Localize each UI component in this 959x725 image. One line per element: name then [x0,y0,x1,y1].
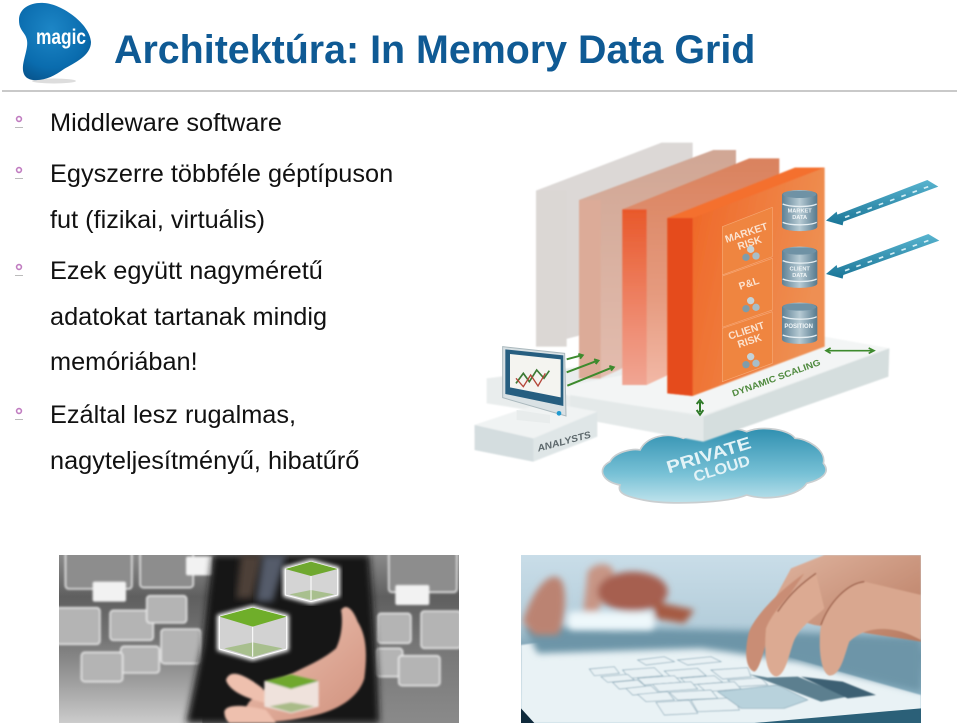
arrow: market feed [826,180,938,225]
bullet [15,408,23,420]
module: p and l [722,258,772,327]
laptop body [521,632,921,723]
dark keys [749,674,876,702]
text: together line 3: memóriában! [50,348,198,376]
keys [589,657,808,715]
text: middleware: Middleware software [50,109,282,137]
database: position: POSITION [784,324,813,330]
module: client risk: RISK [736,333,764,351]
platform [487,337,889,442]
cube middle [219,608,287,658]
floating tiles [56,552,461,686]
database: market data: DATA [792,215,807,221]
module: market risk: RISK [736,235,764,253]
text: flexible: Ezáltal lesz rugalmas, [50,401,296,429]
arrow: horizontal scaling [826,348,874,353]
logo: magic: magic [36,26,86,49]
cube top [285,562,338,602]
header rule [2,90,957,92]
person in suit [186,555,379,723]
database: client data: DATA [792,273,807,279]
module: p and l: P&L [738,276,761,293]
panel 3 [622,158,779,385]
text: together line 2: adatokat tartanak mindig [50,303,327,331]
bullet [15,166,23,179]
database: client data [782,247,817,288]
cube bottom [264,674,319,713]
text: together: Ezek együtt nagyméretű [50,257,323,285]
monitor [503,347,566,423]
text: platforms: Egyszerre többféle géptípuson [50,160,393,188]
module: market risk [722,207,773,275]
right hand [746,555,921,677]
module: client risk: CLIENT [727,321,766,343]
front panel [667,168,825,396]
analyst base [475,402,597,462]
database: market data [782,190,817,231]
label: dynamic scaling: DYNAMIC SCALING [731,357,822,399]
arrow: client feed [826,234,939,279]
panel 2 [579,150,736,378]
database: market data: MARKET [788,208,812,214]
blurred left hand [523,564,694,635]
glowing tiles [93,557,429,605]
text: platforms line 2: fut (fizikai, virtuális) [50,206,265,234]
hand [224,607,366,723]
architecture diagram [474,142,940,504]
text: flexible line 2: nagyteljesítményű, hibatűrő [50,447,359,475]
photo: typing on keyboard [521,555,921,723]
database: client data: CLIENT [789,266,810,272]
bullet [15,116,23,128]
title: Architektúra: In Memory Data Grid [114,28,755,72]
back panel grey [536,143,693,347]
label: analysts: ANALYSTS [535,430,593,455]
cloud: PRIVATE [664,432,753,477]
database: position [782,303,817,344]
bullet [15,264,23,276]
arrow: vertical scaling [697,400,703,415]
photo: hand with cubes [59,555,459,723]
module: market risk: MARKET [724,222,769,246]
module: client risk [722,312,772,382]
cloud: CLOUD [692,453,752,486]
logo: magic [19,2,91,84]
arrows: analyst links [567,354,614,386]
cloud [602,428,826,503]
